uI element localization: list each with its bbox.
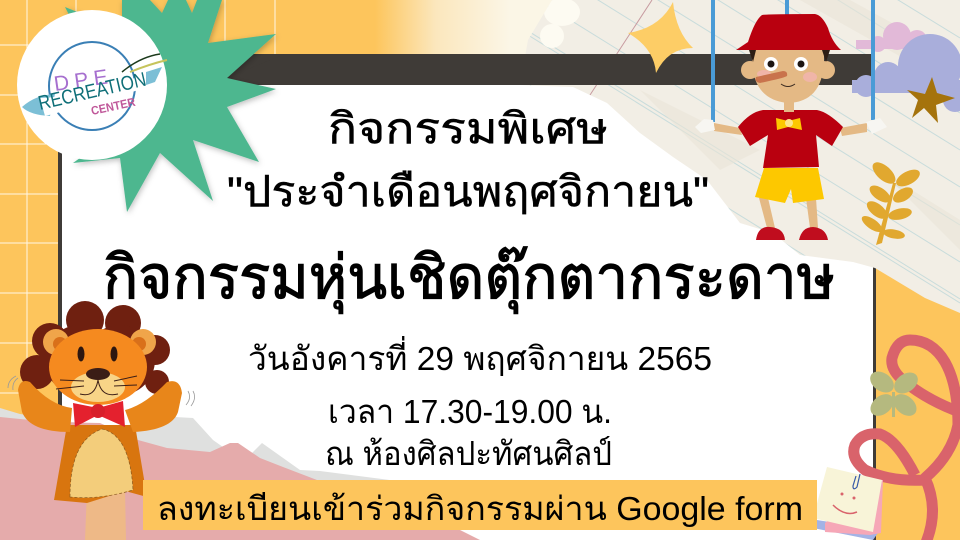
clouds (852, 22, 960, 112)
registration banner (143, 480, 817, 530)
clover leaf (866, 367, 922, 420)
green starburst (65, 0, 276, 212)
torn pink paper: bottom left (0, 408, 480, 540)
puppet hat (736, 14, 841, 50)
torn notebook paper: top right (524, 0, 960, 313)
puppet neck and head (741, 48, 835, 112)
lion body (54, 425, 147, 503)
main title: กิจกรรมหุ่นเชิดตุ๊กตากระดาษ (103, 244, 835, 314)
white card with dark frame (58, 54, 876, 540)
lion hand puppet (8, 301, 195, 540)
logo circle: RECREATION (36, 69, 148, 115)
lion red bow tie (73, 401, 125, 427)
logo circle: CENTER (90, 95, 137, 118)
motion lines (8, 376, 195, 406)
puppet boy (695, 14, 887, 240)
puppet strings (711, 0, 875, 122)
location: ณ ห้องศิลปะทัศนศิลป์ (325, 435, 612, 472)
brown star (907, 77, 955, 123)
puppet bow tie (776, 118, 802, 130)
puppet arms (714, 123, 867, 136)
logo circle: DPE (52, 66, 109, 96)
dark band across the top (226, 54, 872, 85)
lion belly (70, 429, 133, 498)
logo circle (17, 10, 167, 160)
lion arm hand (85, 490, 126, 540)
wheat leaf sprig (859, 158, 923, 245)
puppet legs (756, 198, 828, 240)
lion ears (43, 329, 156, 355)
date: วันอังคารที่ 29 พฤศจิกายน 2565 (248, 336, 712, 377)
time: เวลา 17.30-19.00 น. (328, 393, 612, 430)
lion mane (20, 301, 170, 395)
lion face (49, 329, 147, 405)
puppet shirt (738, 110, 843, 168)
sticky notes with smiley (813, 467, 883, 540)
registration banner: ลงทะเบียนเข้าร่วมกิจกรรมผ่าน Google form (157, 490, 803, 527)
four-point sparkle (628, 2, 693, 73)
lion arms (18, 381, 72, 432)
puppet hands (695, 118, 887, 134)
heading line 1: กิจกรรมพิเศษ (328, 105, 608, 152)
pink ribbon (854, 340, 960, 540)
puppet shorts (755, 168, 824, 203)
heading line 2: "ประจำเดือนพฤศจิกายน" (227, 168, 709, 215)
